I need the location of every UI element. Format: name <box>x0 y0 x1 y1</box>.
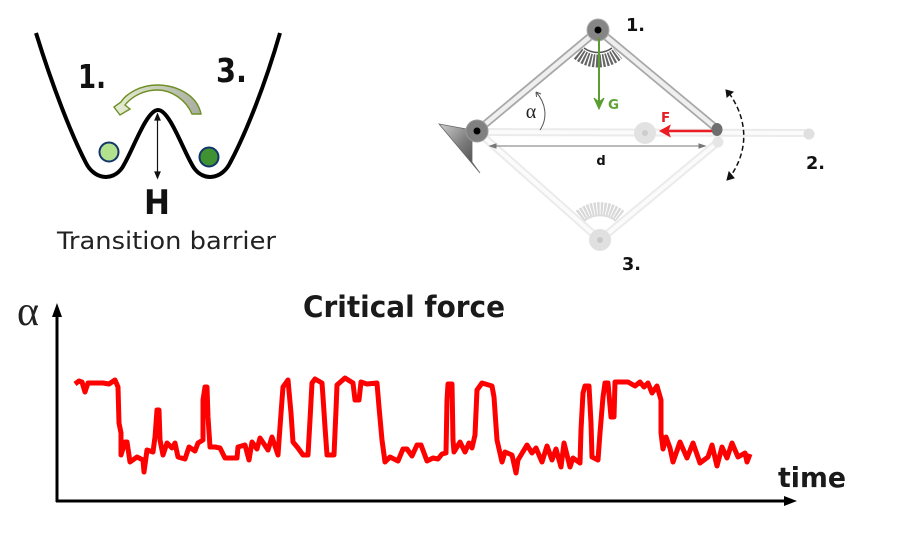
title: critical force: Critical force <box>303 290 505 324</box>
label F: F <box>661 110 670 126</box>
y axis label alpha: α <box>17 289 39 335</box>
ball: state 3 <box>200 148 218 166</box>
dashed motion arrow <box>726 90 744 180</box>
joint: sliding end <box>712 123 722 136</box>
ball: state 1 <box>100 142 118 162</box>
label G: G <box>608 97 619 113</box>
label 3: 3. <box>622 254 641 275</box>
x axis <box>56 496 797 506</box>
label H: H <box>144 183 170 223</box>
label 2: 2. <box>806 153 825 174</box>
icon: wedge support <box>439 124 480 173</box>
red trace <box>75 378 750 473</box>
arrow: force F <box>660 126 712 136</box>
caption: transition barrier: Transition barrier <box>56 227 276 255</box>
joint: pivot <box>466 120 488 142</box>
faint spring: state 3 <box>580 209 620 221</box>
label alpha: α <box>526 101 537 123</box>
state label 3: 3. <box>216 51 247 90</box>
label d: d <box>596 154 606 169</box>
label 1: 1. <box>626 15 645 36</box>
rods: state 1 <box>477 30 717 131</box>
faint rods: state 3 <box>477 131 718 240</box>
panel: mechanism diagram <box>439 15 825 275</box>
angle alpha arc <box>536 92 545 130</box>
joint: top <box>587 19 609 41</box>
barrier height arrow <box>155 114 160 178</box>
icon: transition arrow <box>114 85 201 115</box>
arrow: gravity G <box>594 38 604 109</box>
faint rods: state 2 <box>477 132 809 133</box>
chart: alpha over time <box>17 289 846 506</box>
double-well energy curve <box>36 33 280 177</box>
x axis label time: time <box>778 461 846 494</box>
icon: spring fan <box>578 48 618 61</box>
y axis <box>52 303 62 502</box>
panel: transition barrier diagram <box>36 33 280 255</box>
distance arrow d <box>490 144 705 148</box>
faint joints <box>589 122 814 251</box>
state label 1: 1. <box>78 57 106 96</box>
